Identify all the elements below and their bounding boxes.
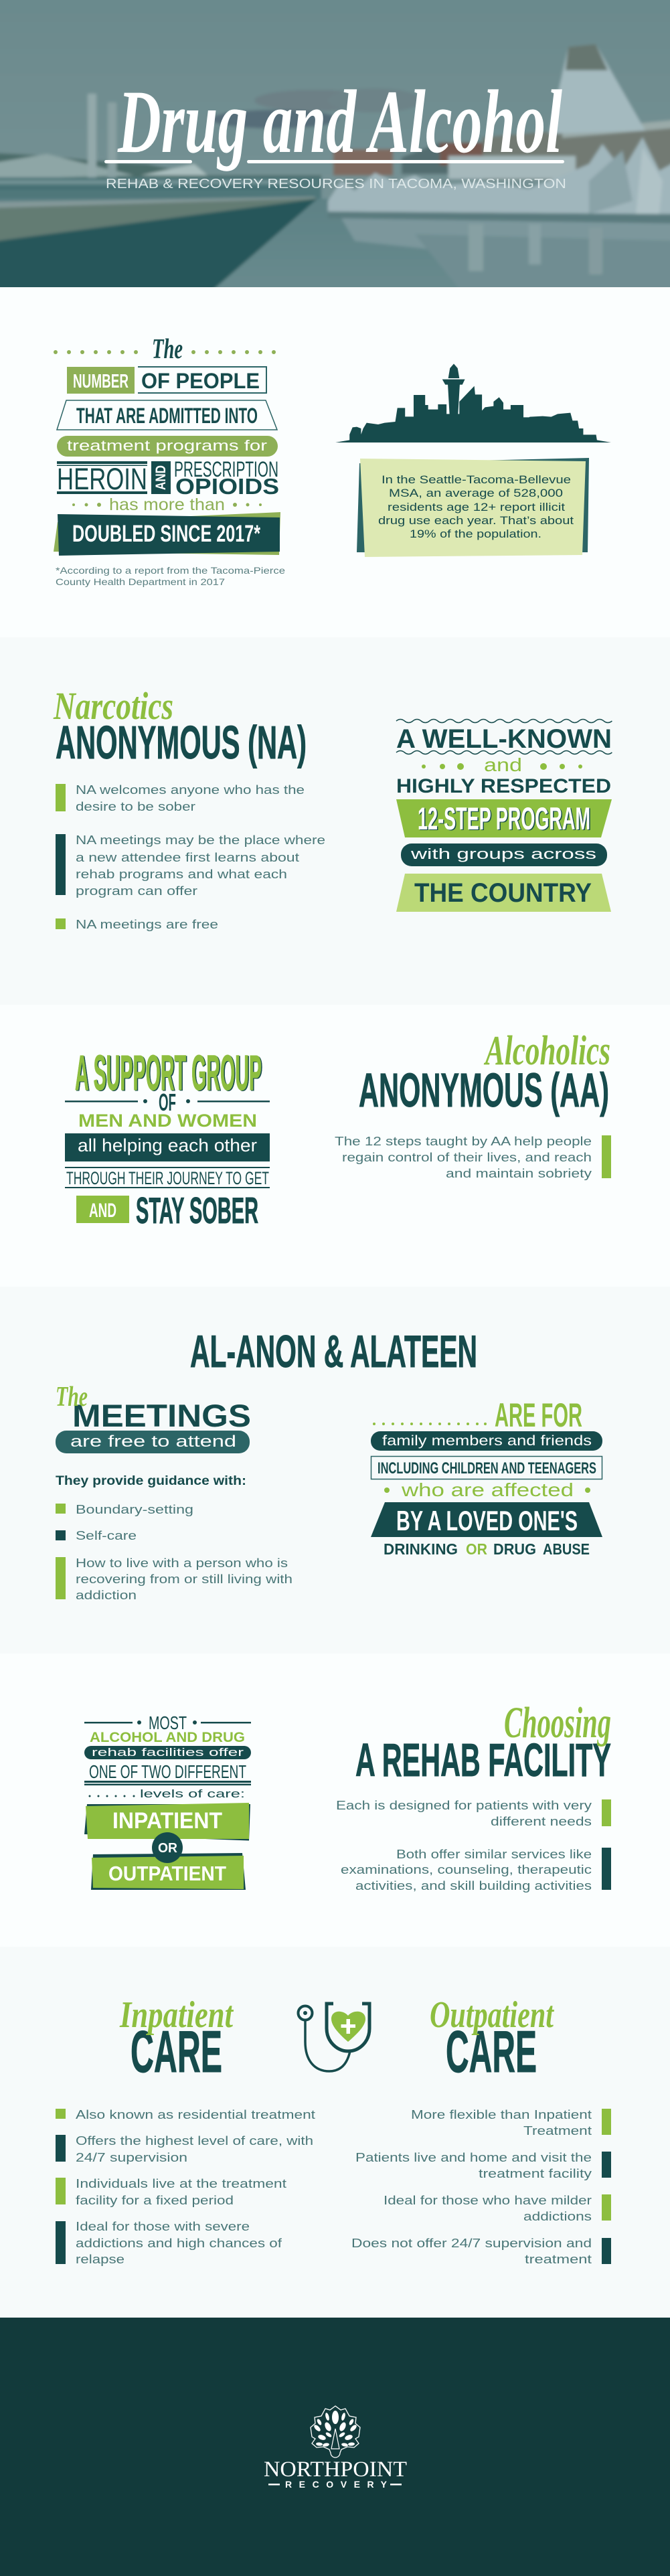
inpatient banner: INPATIENT — [112, 1808, 222, 1834]
panel: Alcoholics Anonymous — [0, 1005, 670, 1287]
typographic quote: who it is for — [371, 1396, 602, 1558]
inpatient heading — [119, 1994, 234, 2085]
callout: MSA statistic: MSA, an average of 528,000 — [389, 487, 563, 499]
callout: MSA statistic: residents age 12+ report illicit — [388, 501, 565, 513]
outpatient list: Patients live and home and visit the — [355, 2151, 592, 2164]
panel: Alcoholics Anonymous: A SUPPORT GROUP — [75, 1045, 262, 1101]
levels of care — [88, 1787, 245, 1800]
and box: AND — [153, 465, 169, 490]
typographic quote: support group — [65, 1045, 270, 1231]
drinking or drug abuse: DRUG — [493, 1540, 536, 1558]
bullet list: NA welcomes anyone who has the — [76, 783, 305, 797]
treatment pill: treatment programs for — [67, 437, 267, 454]
heading — [359, 1028, 610, 1117]
dotted row — [54, 350, 276, 354]
icon: stethoscope with heart — [299, 2004, 369, 2071]
typographic quote: levels of care — [84, 1712, 251, 1890]
panel: choosing a rehab facility — [0, 1654, 670, 1947]
number box: NUMBER — [73, 371, 129, 392]
bullet list: program can offer — [76, 884, 197, 898]
text blocks with bars: Each is designed for patients with very — [336, 1799, 592, 1812]
inpatient list: relapse — [76, 2253, 124, 2266]
drinking or drug abuse — [384, 1540, 590, 1558]
wordmark: RECOVERY — [285, 2479, 388, 2490]
and box — [76, 1196, 129, 1223]
journey line: THROUGH THEIR JOURNEY TO GET — [66, 1168, 269, 1188]
inpatient list — [56, 2108, 315, 2266]
who are affected — [384, 1479, 590, 1500]
panel: statistics — [0, 287, 670, 637]
support group — [75, 1045, 262, 1101]
footnote — [56, 565, 285, 587]
one of two — [84, 1761, 251, 1785]
icon: Seattle skyline — [335, 364, 611, 442]
guidance list: How to live with a person who is — [76, 1556, 288, 1570]
drinking or drug abuse: DRINKING — [384, 1540, 458, 1558]
rehab pill — [84, 1746, 251, 1759]
panel: Al-Anon and Alateen — [0, 1287, 670, 1654]
text blocks with bars: examinations, counseling, therapeutic — [341, 1863, 592, 1876]
outpatient heading: CARE — [446, 2018, 537, 2085]
prescription: PRESCRIPTION — [174, 457, 278, 481]
inpatient list: facility for a fixed period — [76, 2194, 234, 2207]
outpatient list: treatment facility — [479, 2167, 592, 2180]
country banner — [396, 874, 611, 912]
text blocks with bars — [336, 1799, 611, 1893]
and with dots — [422, 754, 582, 775]
most: MOST — [149, 1712, 187, 1733]
of people box: OF PEOPLE — [141, 369, 260, 393]
panel: Alcoholics Anonymous: A SUPPORT GROUP — [76, 1046, 262, 1101]
text blocks with bars: different needs — [491, 1815, 592, 1828]
admitted trapezoid: THAT ARE ADMITTED INTO — [76, 404, 258, 428]
including box — [371, 1457, 602, 1479]
text blocks with bars: Both offer similar services like — [396, 1848, 592, 1861]
loved one banner — [371, 1502, 602, 1537]
inpatient list: addictions and high chances of — [76, 2237, 282, 2250]
text blocks with bars: activities, and skill building activities — [355, 1879, 592, 1893]
bullet list: NA meetings are free — [76, 918, 218, 931]
heroin: HEROIN — [57, 462, 147, 496]
bullet list: a new attendee first learns about — [76, 851, 299, 864]
family pill: family members and friends — [382, 1433, 592, 1449]
helping box: all helping each other — [78, 1135, 257, 1155]
heading — [53, 684, 307, 769]
doubled banner — [54, 512, 280, 556]
guidance list — [56, 1474, 292, 1602]
panel: footer — [0, 2318, 670, 2576]
icon: Northpoint peacock logo — [311, 2406, 360, 2458]
inpatient list: 24/7 supervision — [76, 2151, 187, 2164]
outpatient list: Treatment — [523, 2124, 592, 2138]
footnote: County Health Department in 2017 — [56, 576, 225, 587]
panel: inpatient vs outpatient — [0, 1947, 670, 2318]
and box: AND — [89, 1200, 116, 1222]
rehab pill: rehab facilities offer — [92, 1746, 244, 1759]
typographic statistic — [54, 334, 285, 587]
text block with bar: and maintain sobriety — [446, 1167, 592, 1180]
bullet list: NA meetings may be the place where — [76, 833, 325, 847]
bullet list: rehab programs and what each — [76, 868, 287, 881]
number box — [67, 367, 135, 394]
most — [84, 1712, 251, 1733]
alcohol and drug: ALCOHOL AND DRUG — [90, 1730, 245, 1745]
levels of care: levels of care: — [140, 1787, 245, 1800]
treatment pill — [57, 436, 278, 457]
meetings heading: are free to attend — [70, 1433, 236, 1451]
inpatient list: Also known as residential treatment — [76, 2108, 315, 2121]
photo: Tacoma waterfront — [0, 0, 670, 308]
callout: MSA statistic: In the Seattle-Tacoma-Bellevue — [382, 473, 571, 486]
loved one banner: BY A LOVED ONE'S — [396, 1505, 578, 1536]
opioids: OPIOIDS — [175, 474, 279, 499]
helping box — [65, 1133, 270, 1161]
country banner: THE COUNTRY — [414, 878, 592, 908]
dotted row and are for — [373, 1396, 582, 1434]
drinking or drug abuse: ABUSE — [543, 1540, 590, 1558]
of divider: OF — [159, 1089, 176, 1116]
outpatient list: Does not offer 24/7 supervision and — [351, 2237, 592, 2250]
text block with bar: regain control of their lives, and reach — [342, 1151, 592, 1164]
family pill — [371, 1431, 602, 1451]
outpatient heading — [430, 1994, 554, 2085]
and with dots: and — [484, 754, 522, 775]
inpatient list: Ideal for those with severe — [76, 2220, 250, 2233]
meetings heading: The — [56, 1382, 88, 1413]
typographic quote: 12-step — [396, 719, 612, 912]
guidance list: They provide guidance with: — [56, 1474, 246, 1488]
outpatient list: addictions — [523, 2210, 592, 2223]
groups pill: with groups across — [410, 846, 596, 862]
groups pill — [401, 843, 607, 866]
outpatient heading: Outpatient — [430, 1994, 554, 2036]
guidance list: recovering from or still living with — [76, 1573, 292, 1586]
has more than — [72, 495, 262, 514]
subtitle: REHAB & RECOVERY RESOURCES IN TACOMA, WASHINGTON — [106, 177, 566, 191]
or circle — [152, 1832, 183, 1863]
meetings heading: MEETINGS — [72, 1398, 251, 1433]
highly respected: HIGHLY RESPECTED — [396, 775, 611, 797]
inpatient heading: Inpatient — [119, 1994, 234, 2036]
bullet list — [56, 783, 325, 931]
outpatient list: Ideal for those who have milder — [384, 2194, 592, 2207]
outpatient list: treatment — [525, 2253, 592, 2266]
wordmark: NORTHPOINT — [264, 2458, 407, 2482]
one of two: ONE OF TWO DIFFERENT — [89, 1761, 246, 1782]
callout: MSA statistic: drug use each year. That’s about — [378, 514, 574, 527]
panel: hero banner — [0, 0, 670, 308]
heading — [355, 1698, 611, 1786]
heading: AL-ANON & ALATEEN — [190, 1326, 477, 1377]
or circle: OR — [158, 1841, 178, 1856]
admitted trapezoid — [57, 400, 277, 430]
the: The — [152, 334, 183, 365]
heading: Narcotics — [53, 684, 173, 728]
outpatient banner: OUTPATIENT — [108, 1862, 226, 1885]
callout: MSA statistic: 19% of the population. — [410, 528, 541, 540]
heading: ANONYMOUS (NA) — [56, 716, 307, 769]
meetings heading — [56, 1382, 251, 1453]
inpatient heading: CARE — [131, 2018, 222, 2085]
dotted row and are for: ARE FOR — [495, 1396, 582, 1434]
wavy lines — [396, 719, 612, 754]
text block with bar: The 12 steps taught by AA help people — [335, 1135, 592, 1148]
and box — [151, 461, 171, 494]
men and women: MEN AND WOMEN — [78, 1111, 257, 1131]
doubled banner: DOUBLED SINCE 2017* — [72, 521, 260, 547]
well-known: A WELL-KNOWN — [396, 724, 612, 754]
heading: Alcoholics — [483, 1028, 610, 1074]
inpatient banner — [84, 1803, 250, 1841]
12-step banner — [396, 799, 612, 837]
guidance list: Boundary-setting — [76, 1503, 193, 1516]
stay sober: STAY SOBER — [136, 1190, 258, 1231]
bullet list: desire to be sober — [76, 800, 195, 813]
text block with bar — [335, 1135, 611, 1180]
of divider — [65, 1089, 270, 1116]
guidance list: Self-care — [76, 1529, 137, 1542]
drinking or drug abuse: OR — [466, 1540, 487, 1558]
inpatient list: Individuals live at the treatment — [76, 2177, 286, 2190]
guidance list: addiction — [76, 1589, 137, 1602]
outpatient banner — [91, 1853, 246, 1890]
callout: MSA statistic — [357, 458, 589, 557]
inpatient list: Offers the highest level of care, with — [76, 2134, 313, 2148]
panel: Narcotics Anonymous — [0, 637, 670, 1005]
has more than: has more than — [109, 495, 225, 514]
footnote: *According to a report from the Tacoma-Pierce — [56, 565, 285, 576]
outpatient list: More flexible than Inpatient — [411, 2108, 592, 2121]
who are affected: who are affected — [401, 1479, 574, 1500]
outpatient list — [351, 2108, 611, 2266]
